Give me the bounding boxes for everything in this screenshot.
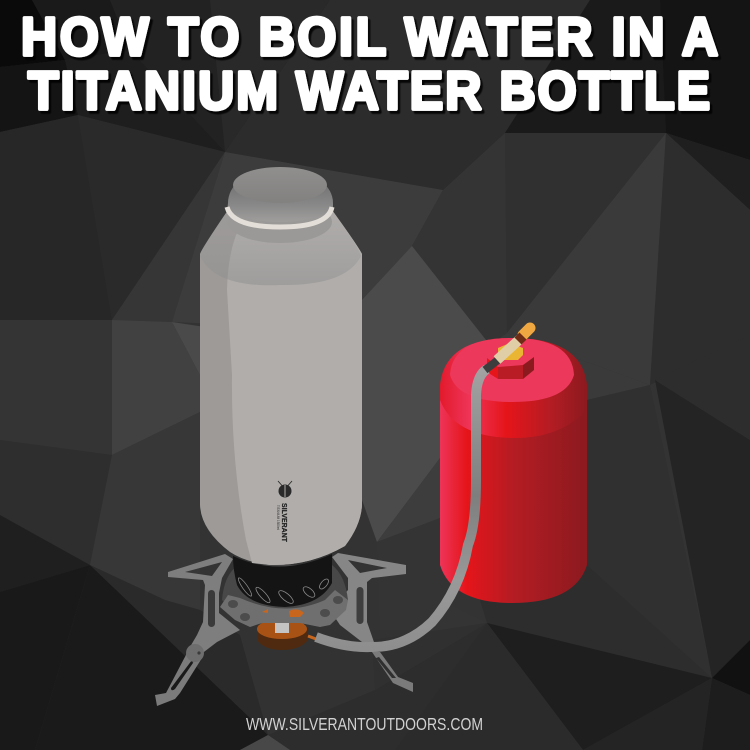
red gas canister xyxy=(440,338,587,603)
canister: pink top xyxy=(450,338,574,402)
hose: dark collar xyxy=(485,360,498,370)
bottle: cap top xyxy=(233,167,327,203)
stove: burner plate xyxy=(220,590,348,627)
bottle: neck shade xyxy=(228,201,332,243)
logo: wordmark: SILVERANT xyxy=(280,503,289,542)
bottle: lighter front panel xyxy=(227,210,362,565)
logo: ant icon xyxy=(278,481,292,498)
stove: orange valve parts xyxy=(262,609,304,617)
canister: lower body xyxy=(440,385,587,603)
stove: left leg xyxy=(168,554,240,655)
bottle: brand logo xyxy=(276,481,292,542)
bottle: body silhouette xyxy=(200,210,362,565)
stove: left joint xyxy=(186,644,204,662)
hose: brown ring xyxy=(518,336,523,341)
gas hose xyxy=(316,328,530,647)
stove: burner base xyxy=(257,619,316,650)
camping stove xyxy=(155,553,413,706)
stove: right leg xyxy=(330,553,406,645)
canister: hex nut xyxy=(487,357,534,379)
stove: burner slots xyxy=(237,577,330,605)
title line 2: TITANIUM WATER BOTTLE xyxy=(28,61,710,121)
canister: upper band xyxy=(440,338,587,438)
stove: dark collar xyxy=(222,565,348,618)
hose: orange tip xyxy=(523,328,530,335)
title xyxy=(21,7,718,121)
hose: beige connector xyxy=(497,339,520,360)
stove: plate holes xyxy=(228,596,343,621)
bottle: shoulder shade xyxy=(200,210,361,285)
stove: left foot xyxy=(155,653,202,706)
stove: black burner dome xyxy=(233,554,332,607)
bottle: neck xyxy=(227,180,333,222)
titanium water bottle xyxy=(200,167,362,565)
canister: brass fitting xyxy=(498,343,523,360)
bottle: white ring xyxy=(227,207,332,227)
stove: left slot xyxy=(208,590,215,627)
stove: right foot xyxy=(372,652,413,692)
website footer: WWW.SILVERANTOUTDOORS.COM xyxy=(246,716,483,734)
logo: capacity text: TITANIUM 1500ml xyxy=(276,505,280,530)
hose: flexible line xyxy=(316,369,487,647)
stove: right slot xyxy=(356,587,364,624)
title line 1: HOW TO BOIL WATER IN A xyxy=(21,7,718,67)
